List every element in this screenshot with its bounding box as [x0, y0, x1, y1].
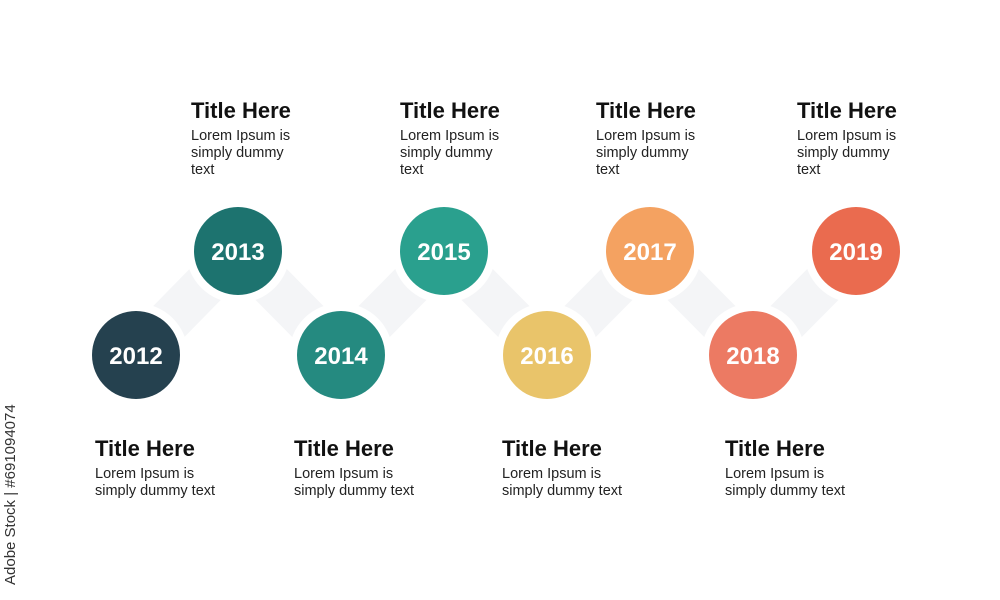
text 2017: text [596, 162, 619, 178]
text 2017: Title Here [596, 98, 696, 123]
text 2019: text [797, 162, 820, 178]
side watermark text: Adobe Stock | #691094074 [2, 404, 19, 585]
text 2015: text [400, 162, 423, 178]
text 2018: Title Here [725, 436, 825, 461]
circle 2016: 2016 [520, 343, 574, 370]
circle 2018 [709, 311, 797, 399]
circle 2015 [400, 207, 488, 295]
circle 2017: 2017 [623, 239, 677, 266]
text 2013: text [191, 162, 214, 178]
circle 2014: 2014 [314, 343, 368, 370]
text 2014 [294, 436, 414, 499]
circle 2015: 2015 [417, 239, 471, 266]
text 2012: Title Here [95, 436, 195, 461]
text 2018: Lorem Ipsum is [725, 466, 824, 482]
text 2013: Title Here [191, 98, 291, 123]
text 2017: simply dummy [596, 145, 689, 161]
text 2015: Title Here [400, 98, 500, 123]
circle 2012 [92, 311, 180, 399]
text 2016 [502, 436, 622, 499]
text 2015: Lorem Ipsum is [400, 128, 499, 144]
text 2018 [725, 436, 845, 499]
circle 2019: 2019 [829, 239, 883, 266]
text 2016: Title Here [502, 436, 602, 461]
text 2017 [596, 98, 696, 178]
text 2013 [191, 98, 291, 178]
text 2016: Lorem Ipsum is [502, 466, 601, 482]
text 2019: Lorem Ipsum is [797, 128, 896, 144]
text 2016: simply dummy text [502, 483, 622, 499]
text 2014: simply dummy text [294, 483, 414, 499]
circle 2013 [194, 207, 282, 295]
text 2014: Lorem Ipsum is [294, 466, 393, 482]
circle 2016 [503, 311, 591, 399]
text 2012: simply dummy text [95, 483, 215, 499]
text 2014: Title Here [294, 436, 394, 461]
text 2019 [797, 98, 897, 178]
text 2013: simply dummy [191, 145, 284, 161]
circle 2017 [606, 207, 694, 295]
text 2012 [95, 436, 215, 499]
circle 2019 [812, 207, 900, 295]
text 2019: simply dummy [797, 145, 890, 161]
circle 2013: 2013 [211, 239, 265, 266]
text 2018: simply dummy text [725, 483, 845, 499]
text 2012: Lorem Ipsum is [95, 466, 194, 482]
circle 2012: 2012 [109, 343, 163, 370]
text 2015: simply dummy [400, 145, 493, 161]
circle 2014 [297, 311, 385, 399]
text 2015 [400, 98, 500, 178]
text 2019: Title Here [797, 98, 897, 123]
circle 2018: 2018 [726, 343, 780, 370]
text 2013: Lorem Ipsum is [191, 128, 290, 144]
text 2017: Lorem Ipsum is [596, 128, 695, 144]
